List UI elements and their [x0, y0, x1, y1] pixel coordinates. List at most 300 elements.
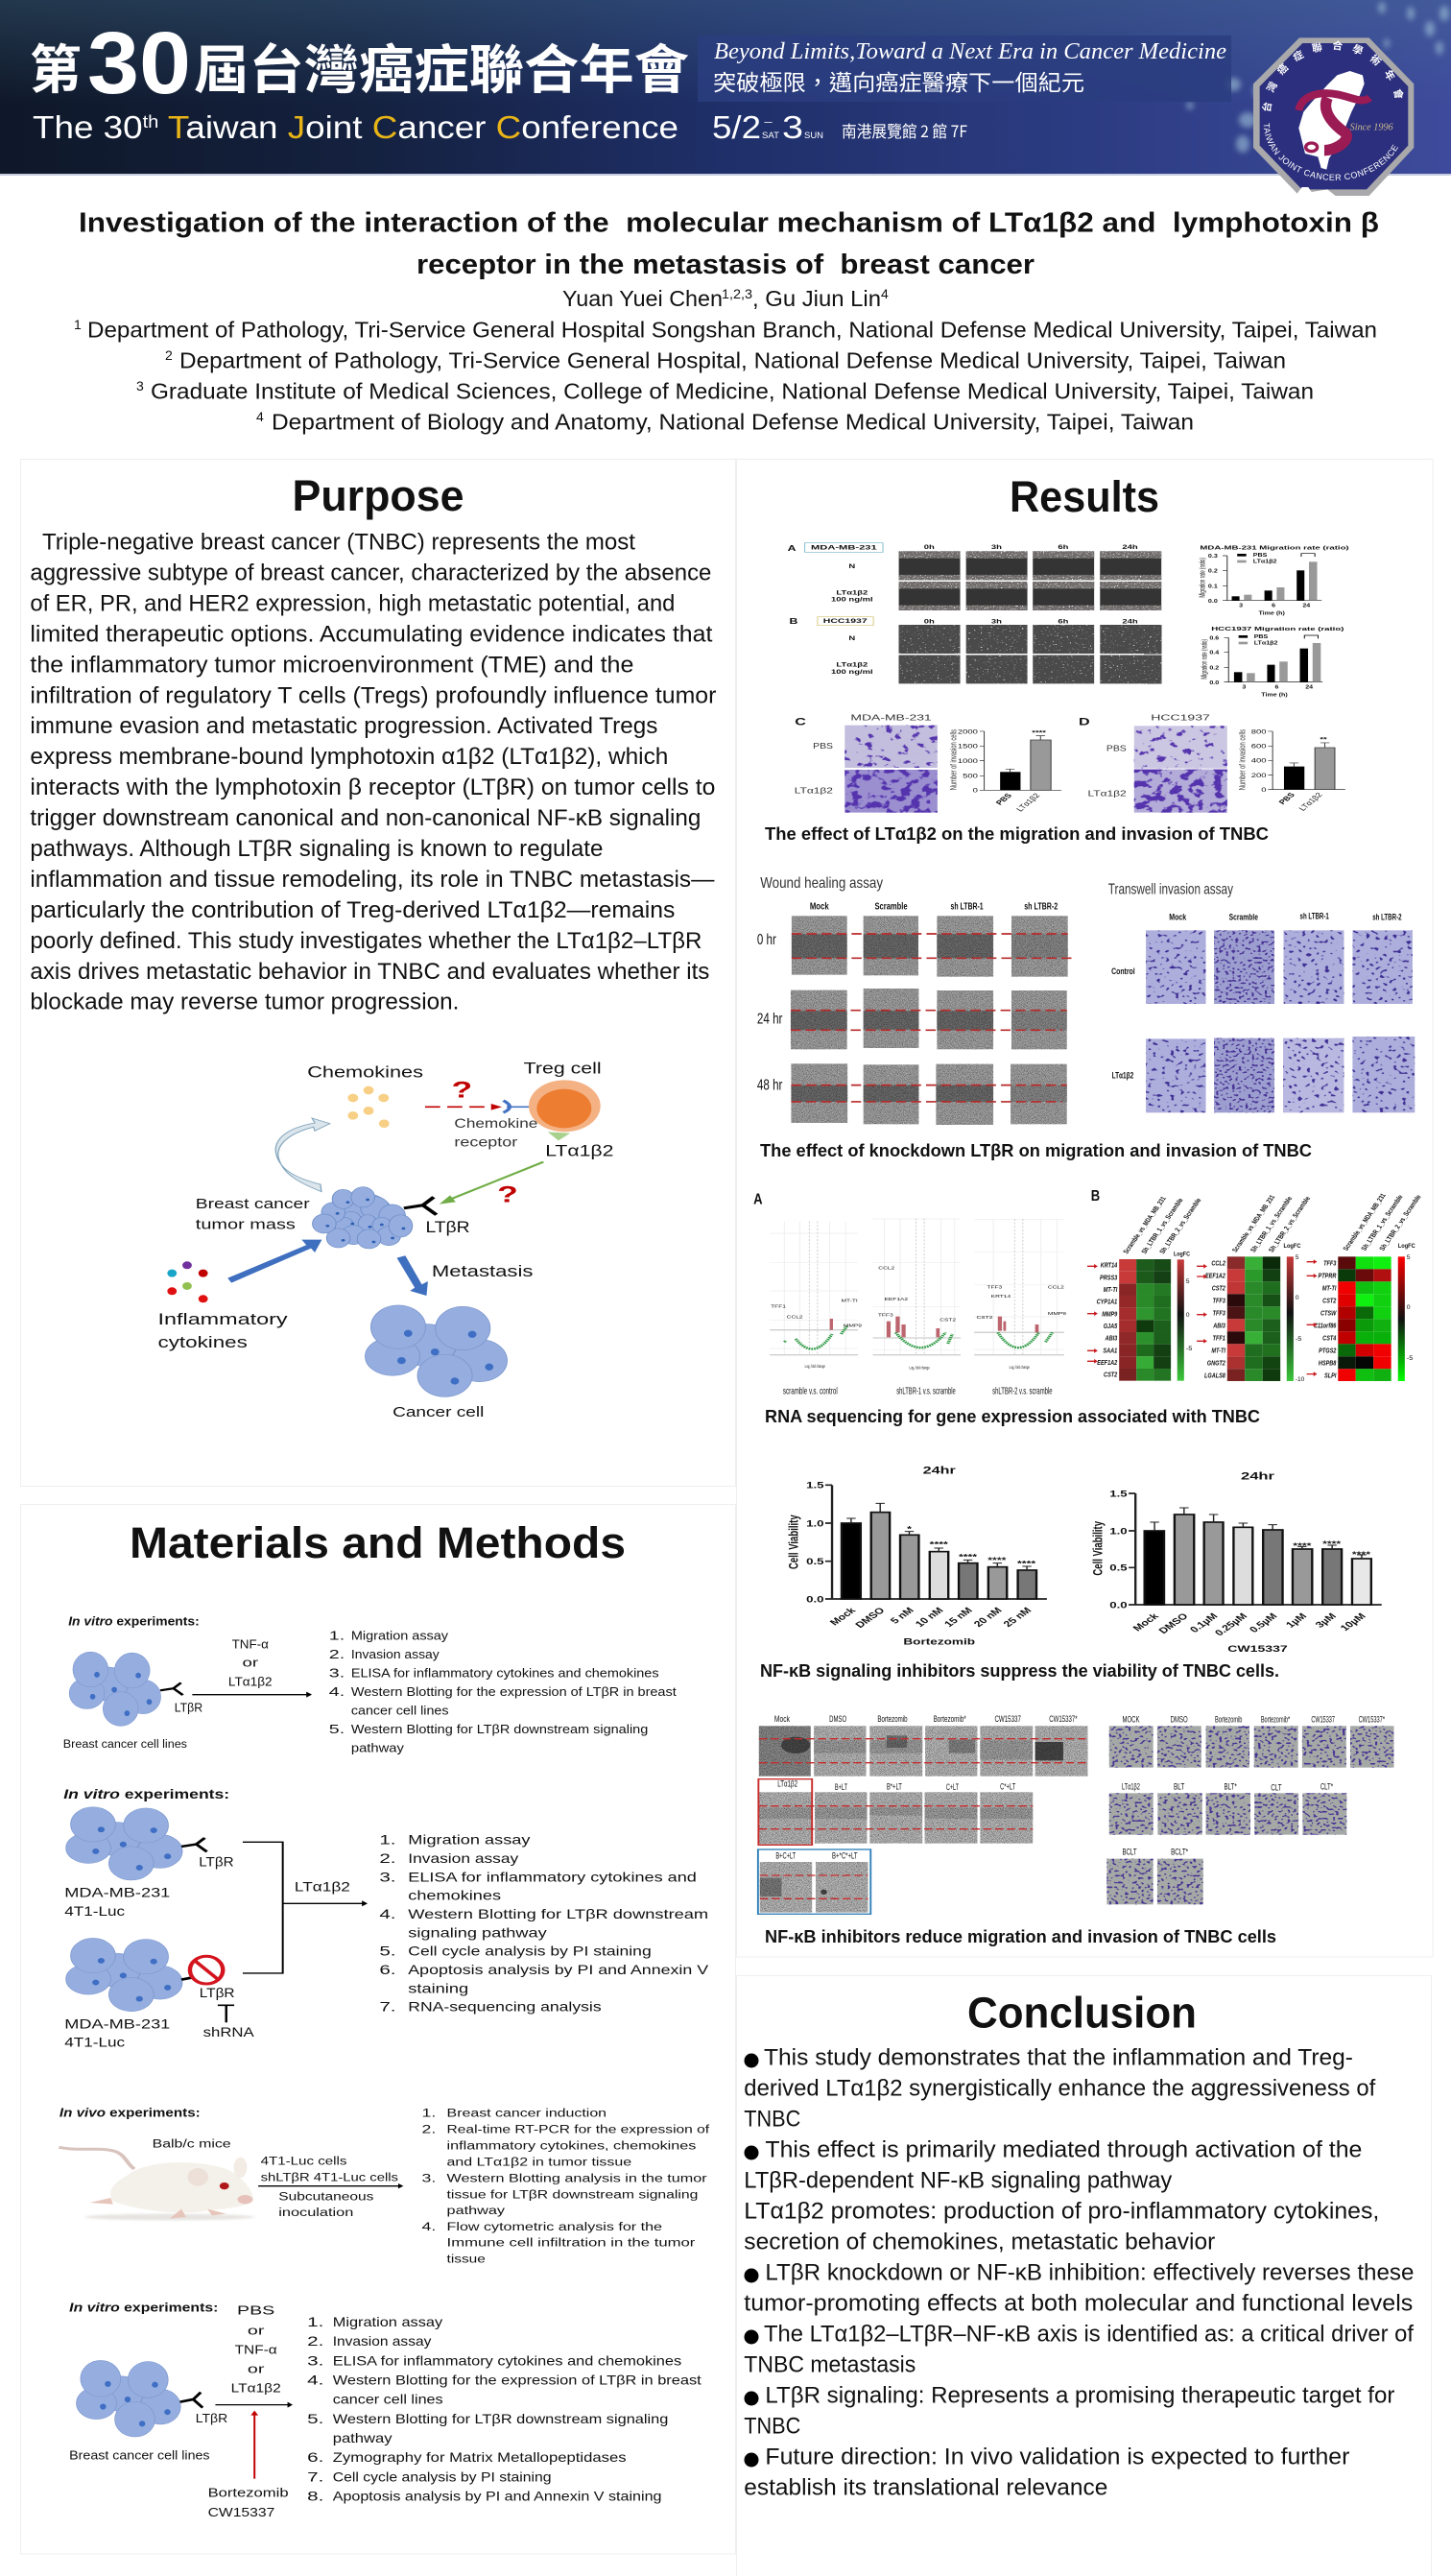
method 3 in vivo: 2. — [422, 2123, 436, 2136]
method 1: 1. — [329, 1628, 345, 1643]
title — [79, 207, 1379, 280]
transwell images — [1106, 1715, 1393, 1904]
heatmap 2: GNGT2 — [1207, 1360, 1225, 1368]
conclusion text: TNBC — [744, 2107, 800, 2133]
method 3 in vivo: Breast cancer induction — [447, 2107, 607, 2120]
chart: CW15337: **** — [1293, 1541, 1312, 1551]
panel D invasion: PBS — [1106, 745, 1127, 753]
chart: HCC1937 migration rate: PBS — [1254, 634, 1268, 640]
method 2: shRNA — [203, 2024, 254, 2039]
chart: MDA-MB-231 migration rate: 24 — [1302, 604, 1311, 608]
conclusion text: TNBC — [744, 2414, 800, 2440]
method 4: pathway — [333, 2430, 392, 2445]
volcano plots: TFF1 — [771, 1304, 786, 1309]
method 2: 7. — [379, 1999, 396, 2015]
tumor mass: Breast cancer — [196, 1195, 310, 1211]
method 4: or — [248, 2362, 265, 2376]
chart: D invasion cells: 0 — [1261, 786, 1267, 794]
volcano plots: scramble v.s. control — [783, 1385, 838, 1396]
volcano plots: Log₂ fold change — [909, 1366, 930, 1371]
heatmap 2: Sh_LTBR_2_vs_Scramble — [1268, 1196, 1313, 1253]
heatmap 2: Sh_LTBR_1_vs_Scramble — [1249, 1196, 1295, 1253]
chart: D invasion cells: PBS — [1277, 791, 1297, 806]
heatmap 2: TFF1 — [1213, 1335, 1225, 1343]
logo — [1253, 37, 1415, 196]
heatmap 2: EEF1A2 — [1205, 1273, 1225, 1280]
chart: bortezomib: **** — [930, 1540, 949, 1549]
heatmap 1: ABI3 — [1105, 1335, 1118, 1343]
method 4: cancer cell lines — [333, 2392, 443, 2407]
chemokine receptor — [454, 1101, 538, 1149]
method 1: LTα1β2 — [228, 1676, 273, 1689]
conclusion text: This study demonstrates that the inflammation and Treg- — [764, 2045, 1353, 2071]
transwell images: BCLT* — [1171, 1848, 1188, 1857]
volcano plots: MMP9 — [844, 1324, 862, 1328]
chart: CW15337: DMSO — [1156, 1611, 1191, 1635]
chart: HCC1937 migration rate: LTα1β2 — [1254, 640, 1278, 646]
transwell invasion assay: Scramble — [1229, 913, 1258, 922]
chart: HCC1937 migration rate: HCC1937 Migration rate (ratio) — [1211, 627, 1344, 632]
chart: C invasion cells: 0 — [973, 787, 978, 794]
chart: bortezomib: 20 nM — [972, 1606, 1005, 1629]
purpose text: poorly defined. This study investigates whether the LTα1β2–LTβR — [30, 928, 702, 954]
method 4: LTβR — [196, 2411, 227, 2425]
chart: MDA-MB-231 migration rate: 6 — [1272, 604, 1276, 608]
purpose mechanism diagram — [158, 1060, 613, 1419]
purpose text: pathways. Although LTβR signaling is known to regulate — [30, 836, 603, 862]
authors — [562, 286, 889, 311]
heatmap 2: TFF3 — [1213, 1310, 1225, 1318]
transwell invasion assay: LTα1β2 — [1112, 1071, 1133, 1081]
wound healing assay: 0 hr — [757, 931, 776, 948]
purpose text: immune evasion and metastatic progression. Activated Tregs — [30, 713, 657, 739]
affiliations: Graduate Institute of Medical Sciences, College of Medicine, National Defense Medical University, Taipei, Taiwan — [151, 379, 1314, 404]
affiliations — [74, 317, 1377, 434]
method 3 in vivo: Immune cell infiltration in the tumor — [447, 2236, 695, 2250]
chart: D invasion cells: 400 — [1251, 757, 1267, 764]
wound healing images: 3h — [991, 543, 1002, 551]
wound healing assay: sh LTBR-2 — [1024, 900, 1058, 912]
conclusion text: TNBC metastasis — [744, 2352, 916, 2378]
heatmap 2: -10 — [1296, 1375, 1305, 1383]
wound healing images — [788, 543, 1161, 683]
transwell images: DMSO — [1171, 1715, 1188, 1725]
chart: bortezomib: DMSO — [853, 1606, 888, 1630]
chart: MDA-MB-231 migration rate: 3 — [1239, 604, 1244, 608]
method 1: ELISA for inflammatory cytokines and chemokines — [351, 1665, 659, 1680]
chart: bortezomib: **** — [959, 1553, 978, 1562]
transwell images: CLT* — [1320, 1782, 1333, 1792]
purpose text: inflammation and tissue remodeling, its role in TNBC metastasis— — [30, 867, 715, 893]
caption 3: RNA sequencing for gene expression associated with TNBC — [765, 1407, 1260, 1426]
figure: cell viability charts — [786, 1465, 1382, 1654]
chart: MDA-MB-231 migration rate: 0.3 — [1208, 554, 1218, 560]
heatmap 2 — [1204, 1195, 1313, 1383]
panel C invasion: C — [795, 715, 806, 727]
dashed red arrow: ? — [451, 1078, 472, 1103]
method 3 in vivo: Subcutaneous — [278, 2190, 373, 2203]
volcano plots: shLTBR-2 v.s. scramble — [992, 1385, 1053, 1396]
method 1: or — [242, 1657, 259, 1670]
chart: CW15337: 3µM — [1313, 1611, 1339, 1630]
volcano plots: CCL2 — [787, 1315, 803, 1320]
purpose text: particularly the contribution of Treg-derived LTα1β2—remains — [30, 897, 675, 923]
chart: D invasion cells — [1237, 728, 1345, 812]
method 1: TNF-α — [232, 1638, 269, 1652]
wound images: B+LT — [835, 1783, 847, 1792]
affiliations: Department of Pathology, Tri-Service General Hospital, National Defense Medical University, Taipei, Taiwan — [179, 347, 1286, 372]
transwell invasion assay: sh LTBR-1 — [1300, 912, 1329, 921]
panel D invasion: LTα1β2 — [1087, 790, 1127, 799]
green arrow: ? — [497, 1182, 518, 1207]
heatmap 3: C11orf86 — [1314, 1323, 1337, 1330]
chemokine receptor: Chemokine — [454, 1115, 538, 1131]
wound healing images: 6h — [1058, 618, 1068, 625]
chart: CW15337: 1.0 — [1109, 1527, 1128, 1537]
caption 1: The effect of LTα1β2 on the migration and invasion of TNBC — [765, 824, 1269, 844]
method 1: 2. — [329, 1647, 345, 1661]
date and venue: 一 — [764, 118, 773, 128]
heatmap 3 — [1314, 1193, 1423, 1381]
affiliations: Department of Pathology, Tri-Service General Hospital Songshan Branch, National Defense Medical University, Taipei, Taiwan — [87, 318, 1377, 343]
method 4: 4. — [307, 2373, 323, 2388]
chart: CW15337: **** — [1352, 1550, 1371, 1560]
banner english title: th — [143, 112, 158, 131]
transwell images: MOCK — [1122, 1715, 1140, 1725]
conclusion text: LTβR-dependent NF-κB signaling pathway — [744, 2168, 1173, 2194]
panel C invasion — [795, 713, 938, 813]
wound healing assay: 24 hr — [757, 1010, 783, 1027]
wound healing images: MDA-MB-231 — [811, 544, 877, 551]
heatmap 2: Scramble_vs_MDA_MB_231 — [1231, 1195, 1277, 1253]
chart: HCC1937 migration rate: 0.2 — [1209, 665, 1220, 671]
heatmap 3: Scramble_vs_MDA_MB_231 — [1343, 1193, 1388, 1252]
banner chinese title: 第 — [30, 27, 82, 104]
panel D invasion: HCC1937 — [1151, 713, 1210, 723]
figure: LTα1β2 migration and invasion — [788, 543, 1349, 813]
method 3 in vivo: In vivo experiments: — [59, 2107, 201, 2120]
purpose text: express membrane-bound lymphotoxin α1β2 (LTα1β2), which — [30, 744, 668, 770]
method 2: Migration assay — [408, 1832, 531, 1848]
heatmap 1: CST2 — [1104, 1371, 1118, 1379]
volcano plots: TFF3 — [878, 1313, 893, 1318]
heatmap 1: CYP1A1 — [1097, 1299, 1118, 1306]
transwell images: CW15337 — [1311, 1715, 1335, 1725]
date and venue: 3 — [782, 109, 803, 145]
conclusion text: This effect is primarily mediated through activation of the — [765, 2137, 1362, 2163]
chart: bortezomib: 0.0 — [806, 1595, 824, 1605]
method 1: Migration assay — [351, 1628, 449, 1643]
heatmap 2: 5 — [1296, 1253, 1299, 1261]
method 3 in vivo: shLTβR 4T1-Luc cells — [261, 2171, 398, 2184]
method 1 — [63, 1613, 677, 1755]
method 1: cancer cell lines — [351, 1704, 449, 1718]
method 4: 2. — [307, 2333, 323, 2349]
method 1: 3. — [329, 1665, 345, 1680]
method 2: Western Blotting for LTβR downstream — [408, 1906, 708, 1921]
banner english title: Taiwan Joint Cancer Conference — [168, 109, 662, 145]
method 2: 4T1-Luc — [64, 2035, 125, 2050]
chart: MDA-MB-231 migration rate: 0.2 — [1208, 569, 1218, 574]
metastasis arrow — [397, 1255, 533, 1296]
purpose text: Triple-negative breast cancer (TNBC) represents the most — [42, 530, 635, 556]
chart: bortezomib: 15 nM — [942, 1606, 975, 1629]
icon: mouse — [59, 2147, 254, 2220]
chart: CW15337: 24hr — [1241, 1470, 1274, 1482]
chart: MDA-MB-231 migration rate: 0.1 — [1208, 584, 1218, 589]
heatmap 1: PRSS3 — [1100, 1275, 1118, 1282]
wound healing images: N — [848, 634, 855, 642]
chart: CW15337 — [1090, 1470, 1382, 1654]
conclusion text: Future direction: In vivo validation is expected to further — [765, 2445, 1349, 2470]
icon: prohibition sign — [190, 1956, 223, 1984]
wound healing images: N — [848, 562, 855, 570]
chart: D invasion cells: ** — [1320, 736, 1328, 743]
volcano plots: A — [753, 1190, 763, 1207]
method 3 in vivo: pathway — [447, 2205, 505, 2217]
wound images: LTα1β2 — [777, 1779, 797, 1789]
chart: bortezomib: **** — [1017, 1560, 1036, 1568]
method 2: Invasion assay — [408, 1850, 518, 1866]
wound images: B+*C*+LT — [832, 1851, 858, 1861]
method 4: Migration assay — [333, 2314, 442, 2329]
method 2: chemokines — [408, 1888, 501, 1903]
method 1: Western Blotting for LTβR downstream signaling — [351, 1722, 648, 1736]
method 2: LTβR — [200, 1985, 235, 2000]
chart: MDA-MB-231 migration rate: PBS — [1253, 553, 1267, 559]
cytokines: cytokines — [158, 1334, 248, 1351]
heatmap 2: MT-TI — [1211, 1348, 1225, 1355]
wound images: CW15337* — [1049, 1715, 1078, 1724]
wound images: CW15337 — [994, 1715, 1021, 1724]
metastasis arrow: Metastasis — [432, 1263, 533, 1280]
heatmap 2: LogFC — [1283, 1242, 1301, 1250]
panel: conclusion — [737, 1975, 1432, 2576]
DNA decoration — [1186, 2, 1449, 153]
chart: MDA-MB-231 migration rate: MDA-MB-231 Migration rate (ratio) — [1200, 545, 1349, 551]
heatmap 1: Sh_LTBR_1_vs_Scramble — [1140, 1198, 1185, 1254]
cytokines — [158, 1261, 288, 1351]
conclusion text: establish its translational relevance — [744, 2475, 1107, 2501]
heatmaps: B — [1091, 1187, 1100, 1205]
method 4: In vitro experiments: — [69, 2300, 218, 2314]
chart: MDA-MB-231 migration rate: 0.0 — [1208, 599, 1218, 605]
purpose text: limited therapeutic options. Accumulating evidence indicates that — [30, 621, 713, 647]
banner — [0, 0, 1451, 176]
chart: C invasion cells: 2000 — [958, 728, 978, 735]
method 2: In vitro experiments: — [63, 1786, 229, 1801]
transwell invasion assay — [1108, 881, 1415, 1112]
figure: knockdown LTβR — [757, 874, 1415, 1125]
purpose text: infiltration of regulatory T cells (Tregs) profoundly influence tumor — [30, 682, 716, 708]
date and venue: 5/2 — [712, 109, 761, 145]
volcano plots: TFF3 — [987, 1285, 1002, 1290]
chart: HCC1937 migration rate: 0.6 — [1209, 635, 1220, 641]
affiliations: 1 — [74, 317, 82, 332]
heatmap 1: MMP9 — [1102, 1311, 1118, 1319]
chart: bortezomib: 0.5 — [806, 1558, 824, 1566]
chart: MDA-MB-231 migration rate — [1198, 545, 1349, 616]
heatmap 1: SAA1 — [1103, 1348, 1118, 1355]
cancer cell — [366, 1305, 507, 1419]
chart: C invasion cells: 1000 — [958, 757, 978, 765]
method 3 in vivo — [59, 2107, 710, 2266]
chart: C invasion cells — [949, 728, 1061, 813]
heatmap 2: CST2 — [1212, 1285, 1225, 1293]
transwell images: BLT* — [1224, 1782, 1237, 1792]
banner chinese title: 30 — [87, 14, 191, 112]
conclusion heading: Conclusion — [967, 1989, 1197, 2038]
method 2: 3. — [379, 1870, 396, 1884]
heatmap 3: CST4 — [1322, 1335, 1337, 1343]
chart: bortezomib: Mock — [828, 1606, 859, 1628]
method 3 in vivo: tissue — [447, 2253, 486, 2266]
method 4: Breast cancer cell lines — [69, 2449, 210, 2462]
transwell images: CLT — [1271, 1783, 1282, 1793]
method 3 in vivo: 3. — [422, 2172, 436, 2184]
method 3 in vivo: 4T1-Luc cells — [261, 2155, 346, 2168]
caption 2: The effect of knockdown LTβR on migration and invasion of TNBC — [760, 1141, 1312, 1160]
logo chinese text: 台灣癌症聯合學術年會 — [1261, 40, 1403, 111]
wound healing images: A — [788, 544, 797, 553]
wound healing assay: Wound healing assay — [760, 874, 883, 892]
transwell images: BCLT — [1122, 1848, 1137, 1857]
panel: materials and methods — [21, 1505, 735, 2554]
method 1: In vitro experiments: — [68, 1613, 200, 1629]
caption 5: NF-κB inhibitors reduce migration and invasion of TNBC cells — [765, 1927, 1276, 1946]
affiliations: 4 — [256, 409, 264, 424]
heatmap 3: CTSW — [1320, 1310, 1337, 1318]
panel C invasion: PBS — [813, 742, 833, 751]
treg cell — [524, 1060, 602, 1140]
affiliations: Department of Biology and Anatomy, National Defense Medical University, Taipei, Taiwan — [272, 409, 1194, 434]
method 1: Breast cancer cell lines — [63, 1738, 187, 1751]
tagline box — [698, 36, 1231, 102]
method 3 in vivo: Flow cytometric analysis for the — [447, 2221, 662, 2233]
chart: bortezomib: 24hr — [923, 1465, 956, 1476]
method 4: LTα1β2 — [231, 2381, 281, 2396]
chart: HCC1937 migration rate: 24 — [1305, 685, 1314, 690]
chart: CW15337: 10µM — [1338, 1611, 1368, 1633]
heatmap 2: LGALS8 — [1204, 1372, 1225, 1380]
transwell images: CW15337* — [1359, 1715, 1385, 1725]
heatmap 3: PTGS2 — [1319, 1348, 1337, 1355]
title: Investigation of the interaction of the molecular mechanism of LTα1β2 and lymphotoxin β — [79, 207, 1379, 238]
method 2: Apoptosis analysis by PI and Annexin V — [408, 1962, 708, 1977]
chart: D invasion cells: 200 — [1251, 772, 1267, 779]
heatmap 3: MT-TI — [1322, 1285, 1337, 1293]
method 1: 5. — [329, 1722, 345, 1736]
method 1: Western Blotting for the expression of LTβR in breast — [351, 1684, 677, 1699]
cytokines: Inflammatory — [158, 1311, 288, 1328]
LTβR receptor: LTβR — [425, 1219, 470, 1236]
chart: C invasion cells: Number of invasion cells — [949, 729, 959, 790]
transwell images: Bortezomib — [1215, 1715, 1242, 1725]
chart: MDA-MB-231 migration rate: Migration rate (ratio) — [1198, 558, 1207, 598]
heatmap 1: 5 — [1186, 1277, 1190, 1285]
LTα1β2 label: LTα1β2 — [545, 1142, 613, 1159]
method 4: PBS — [237, 2303, 274, 2318]
chart: MDA-MB-231 migration rate: LTα1β2 — [1253, 560, 1277, 564]
purpose heading: Purpose — [292, 471, 464, 520]
chart: CW15337: 0.5 — [1109, 1563, 1128, 1573]
method 4: 5. — [307, 2411, 323, 2426]
method 2: MDA-MB-231 — [64, 2016, 170, 2031]
conclusion text: LTβR knockdown or NF-κB inhibition: effectively reverses these — [765, 2260, 1414, 2286]
method 1: pathway — [351, 1741, 404, 1755]
chart: D invasion cells: LTα1β2 — [1297, 791, 1324, 812]
chart: CW15337: Mock — [1130, 1611, 1161, 1634]
method 2: signaling pathway — [408, 1925, 547, 1940]
chart: CW15337: 1µM — [1284, 1611, 1310, 1630]
heatmap 1: GJA5 — [1104, 1323, 1118, 1330]
volcano plots: shLTBR-1 v.s. scramble — [896, 1385, 956, 1396]
chart: bortezomib: 1.5 — [806, 1481, 824, 1491]
method 3 in vivo: Western Blotting analysis in the tumor — [447, 2172, 707, 2184]
method 2: Cell cycle analysis by PI staining — [408, 1944, 652, 1959]
date and venue: SAT — [762, 131, 780, 140]
date and venue: SUN — [804, 131, 823, 140]
chart: CW15337: 0.1µM — [1188, 1611, 1221, 1634]
chart: bortezomib: * — [907, 1525, 913, 1534]
conclusion text: The LTα1β2–LTβR–NF-κB axis is identified as: a critical driver of — [764, 2322, 1414, 2348]
panel C invasion: LTα1β2 — [795, 787, 833, 796]
chart: bortezomib: 5 nM — [889, 1606, 916, 1626]
chart: CW15337: 1.5 — [1109, 1490, 1128, 1499]
wound healing assay: Mock — [810, 900, 829, 912]
method 4: 1. — [307, 2314, 323, 2329]
wound healing images: 100 ng/ml — [831, 596, 873, 603]
method 4: Western Blotting for the expression of LTβR in breast — [333, 2373, 702, 2388]
caption 4: NF-κB signaling inhibitors suppress the viability of TNBC cells. — [760, 1661, 1279, 1681]
chart: C invasion cells: **** — [1032, 729, 1047, 736]
method 4: 6. — [307, 2449, 323, 2465]
volcano plots: EEF1A2 — [884, 1298, 908, 1302]
chemokines — [307, 1063, 423, 1128]
method 2: 6. — [379, 1962, 396, 1977]
heatmap 1 — [1097, 1196, 1203, 1381]
heatmap 2: 0 — [1296, 1294, 1299, 1301]
chart: D invasion cells: Number of invasion cells — [1237, 729, 1248, 790]
wound images: Bortezomib — [877, 1715, 908, 1724]
wound images: C+LT — [946, 1783, 959, 1792]
logo english text: TAIWAN JOINT CANCER CONFERENCE — [1263, 123, 1398, 180]
method 2: LTα1β2 — [295, 1879, 350, 1895]
transwell invasion assay: Control — [1111, 967, 1135, 976]
dashed red arrow — [425, 1078, 502, 1110]
chart: C invasion cells: LTα1β2 — [1014, 792, 1042, 813]
conclusion text: tumor-promoting effects at both molecular and functional levels — [744, 2291, 1413, 2317]
method 4: Zymography for Matrix Metallopeptidases — [333, 2449, 627, 2465]
heatmap 3: -5 — [1407, 1354, 1414, 1362]
figure: NF-κB inhibitors migration and invasion — [758, 1715, 1393, 1914]
method 4: or — [248, 2323, 265, 2337]
method 4: Cell cycle analysis by PI staining — [333, 2469, 552, 2484]
method 3 in vivo: 1. — [422, 2107, 436, 2120]
volcano plots: CST2 — [940, 1318, 956, 1323]
volcano plots: Log₂ fold change — [805, 1365, 825, 1370]
heatmap 1: LogFC — [1174, 1251, 1190, 1257]
title: receptor in the metastasis of breast cancer — [416, 250, 1035, 280]
chart: C invasion cells: 1500 — [958, 743, 978, 750]
heatmap 3: 5 — [1407, 1253, 1411, 1261]
method 4: TNF-α — [235, 2342, 277, 2356]
heatmap 2: TFF3 — [1213, 1298, 1225, 1305]
purpose text — [30, 530, 716, 1015]
volcano plots: CCL2 — [1048, 1285, 1064, 1290]
chart: bortezomib — [786, 1465, 1047, 1647]
wound images: Mock — [774, 1715, 790, 1724]
